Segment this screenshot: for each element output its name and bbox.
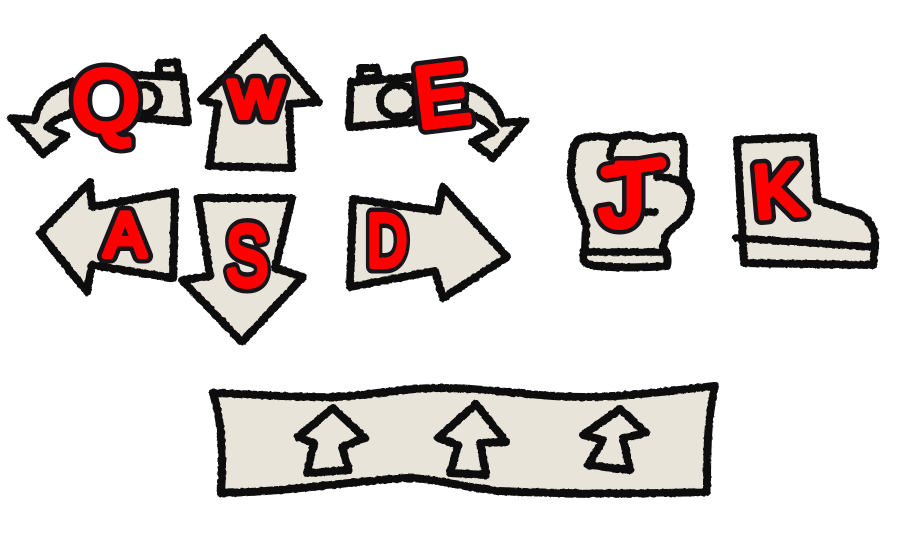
icon: arrow 1 xyxy=(298,408,365,473)
icon: E key, camera turning right xyxy=(349,44,525,158)
letter W: W xyxy=(229,70,283,128)
letter J: J xyxy=(599,145,645,246)
letter Q: Q xyxy=(72,54,140,149)
icon: K key, boot xyxy=(736,137,875,265)
letter S: S xyxy=(226,208,268,303)
letter Q: Q xyxy=(72,54,140,149)
icon: W key, up arrow xyxy=(201,38,319,168)
letter A: A xyxy=(104,201,146,270)
icon: J key, fist xyxy=(571,135,691,267)
icon: arrow 3 xyxy=(583,409,646,470)
letter S: S xyxy=(226,208,268,303)
letter D: D xyxy=(367,199,407,282)
letter A: A xyxy=(104,201,146,270)
letter E: E xyxy=(409,44,475,146)
letter K: K xyxy=(750,147,806,234)
icon: D key, right arrow xyxy=(350,187,507,298)
letter K: K xyxy=(750,147,806,234)
icon: arrow 2 xyxy=(438,404,506,475)
icon: A key, left arrow xyxy=(40,182,175,292)
panel: jump bar with three up arrows xyxy=(213,386,715,493)
letter D: D xyxy=(367,199,407,282)
letter E: E xyxy=(409,44,475,146)
icon: Q key, camera turning left xyxy=(11,54,188,154)
icon: S key, down arrow xyxy=(182,198,303,342)
letter J: J xyxy=(599,145,645,246)
letter W: W xyxy=(229,70,283,128)
